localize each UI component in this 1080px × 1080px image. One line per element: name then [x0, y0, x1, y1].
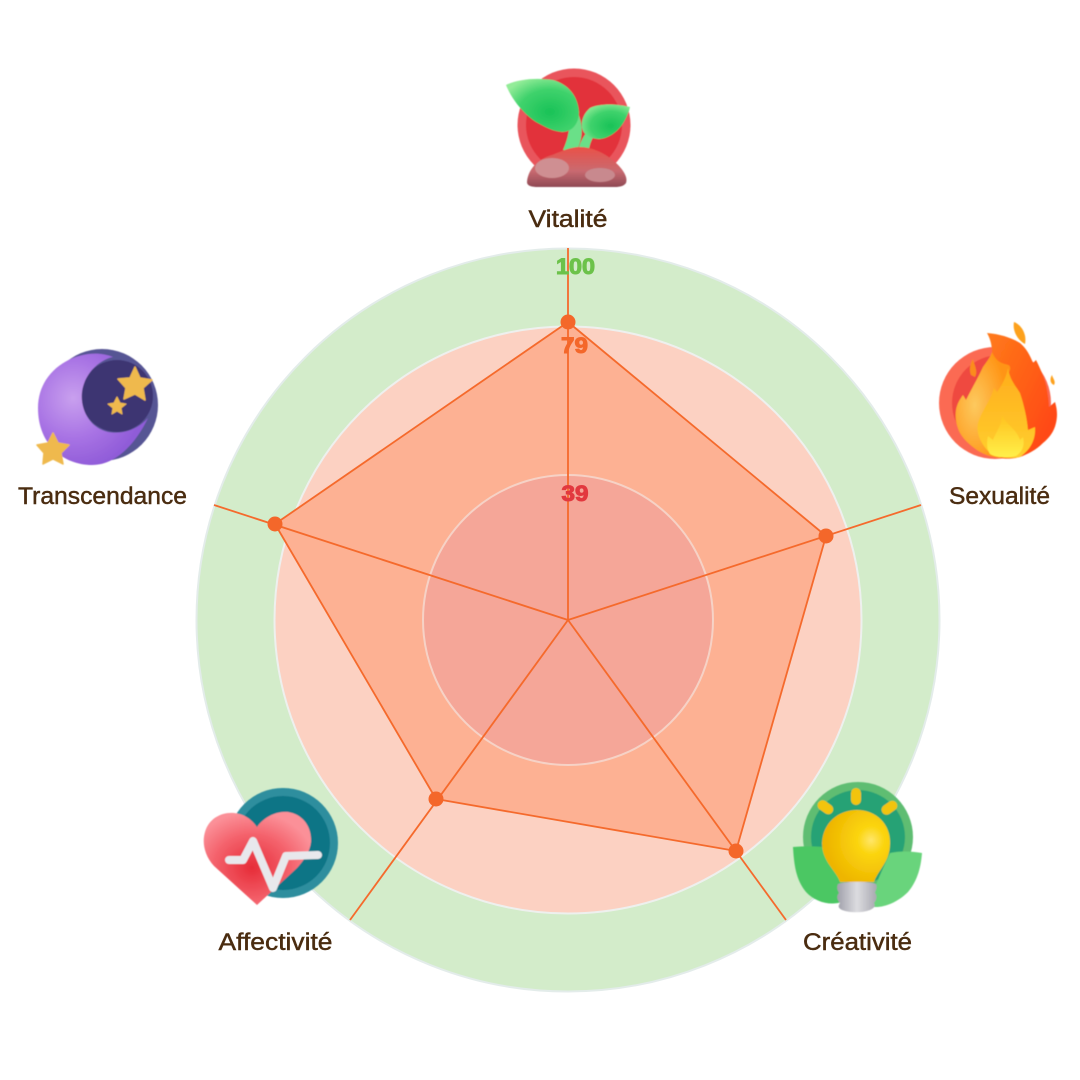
middle ring: score 79: [274, 326, 862, 914]
label: Affectivité: Affectivité: [218, 929, 332, 956]
label: Transcendance: Transcendance: [18, 483, 187, 510]
icon: small star: [108, 397, 126, 414]
radar chart: [196, 248, 940, 992]
icon: heart (Affectivité): [204, 788, 338, 905]
icon: light bulb (Créativité): [793, 782, 922, 912]
icon: crescent moon (Transcendance): [37, 349, 158, 465]
icon: large star: [118, 367, 152, 400]
data polygon: [275, 322, 826, 851]
label: Vitalité: Vitalité: [528, 206, 608, 233]
scale label 39: 39: [562, 481, 588, 506]
icon: star: [37, 433, 69, 464]
label: Créativité: Créativité: [803, 929, 912, 956]
scale label 79: 79: [561, 333, 588, 358]
outer ring: score 100: [196, 248, 940, 992]
inner ring: score 39: [423, 475, 713, 765]
scale label 100: 100: [556, 254, 595, 279]
icon: sprout (Vitalité): [506, 68, 630, 187]
radar axes: [214, 248, 921, 920]
icon: flame (Sexualité): [939, 322, 1057, 459]
data points: [268, 314, 834, 858]
label: Sexualité: Sexualité: [949, 483, 1050, 510]
